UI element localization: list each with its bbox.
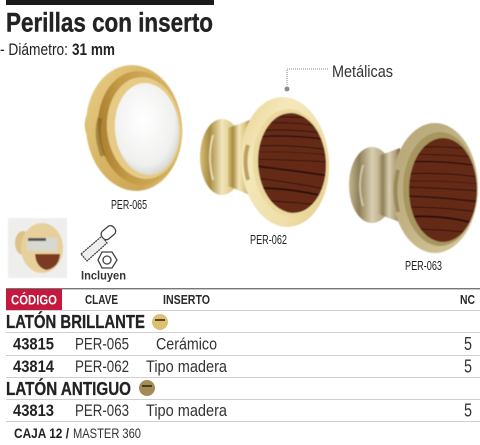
- table header: CLAVE: [85, 292, 118, 307]
- product labels: [111, 197, 442, 273]
- row 43813: 5: [464, 400, 472, 420]
- row 43813: [13, 400, 472, 420]
- table header: [6, 289, 475, 310]
- diameter text: - Diámetro:: [0, 41, 68, 59]
- knob: PER-062 wood, bright brass: [200, 94, 333, 230]
- row 43815: 43815: [13, 334, 54, 354]
- row 43814: 5: [464, 356, 472, 376]
- table header: CÓDIGO: [11, 290, 57, 308]
- row 43813: 43813: [13, 401, 54, 420]
- group: latón brillante: LATÓN BRILLANTE: [6, 311, 145, 332]
- package thumbnail: [8, 218, 67, 278]
- callout: Metálicas: [284, 62, 393, 92]
- row 43814: [13, 356, 472, 376]
- knob: PER-065 ceramic: [81, 61, 187, 195]
- row 43815: [13, 333, 472, 354]
- footer: box and master quantities: MASTER 360: [73, 425, 141, 441]
- row 43814: Tipo madera: [146, 357, 227, 376]
- includes label: Incluyen: [81, 268, 126, 282]
- row 43813: Tipo madera: [146, 401, 227, 420]
- group: latón antiguo: LATÓN ANTIGUO: [6, 378, 131, 399]
- diameter text: 31 mm: [72, 41, 115, 59]
- footer: box and master quantities: CAJA 12 /: [14, 425, 69, 441]
- product labels: PER-065: [111, 197, 147, 212]
- callout: Metálicas: Metálicas: [332, 62, 393, 81]
- icon: screw and nut: [81, 224, 117, 268]
- row 43815: 5: [464, 333, 472, 354]
- product labels: PER-062: [250, 232, 287, 247]
- table header: INSERTO: [163, 292, 210, 307]
- footer: box and master quantities: [14, 425, 141, 441]
- row 43815: PER-065: [75, 334, 129, 354]
- table: [6, 288, 480, 422]
- table header: NC: [460, 292, 475, 307]
- title: Perillas con inserto: [6, 8, 213, 38]
- row 43814: PER-062: [75, 357, 129, 376]
- product labels: PER-063: [405, 258, 442, 273]
- knob: PER-063 wood, antique brass: [349, 123, 480, 253]
- top bar: [6, 0, 214, 5]
- row 43815: Cerámico: [156, 334, 217, 354]
- row 43814: 43814: [13, 357, 54, 376]
- row 43813: PER-063: [75, 401, 129, 420]
